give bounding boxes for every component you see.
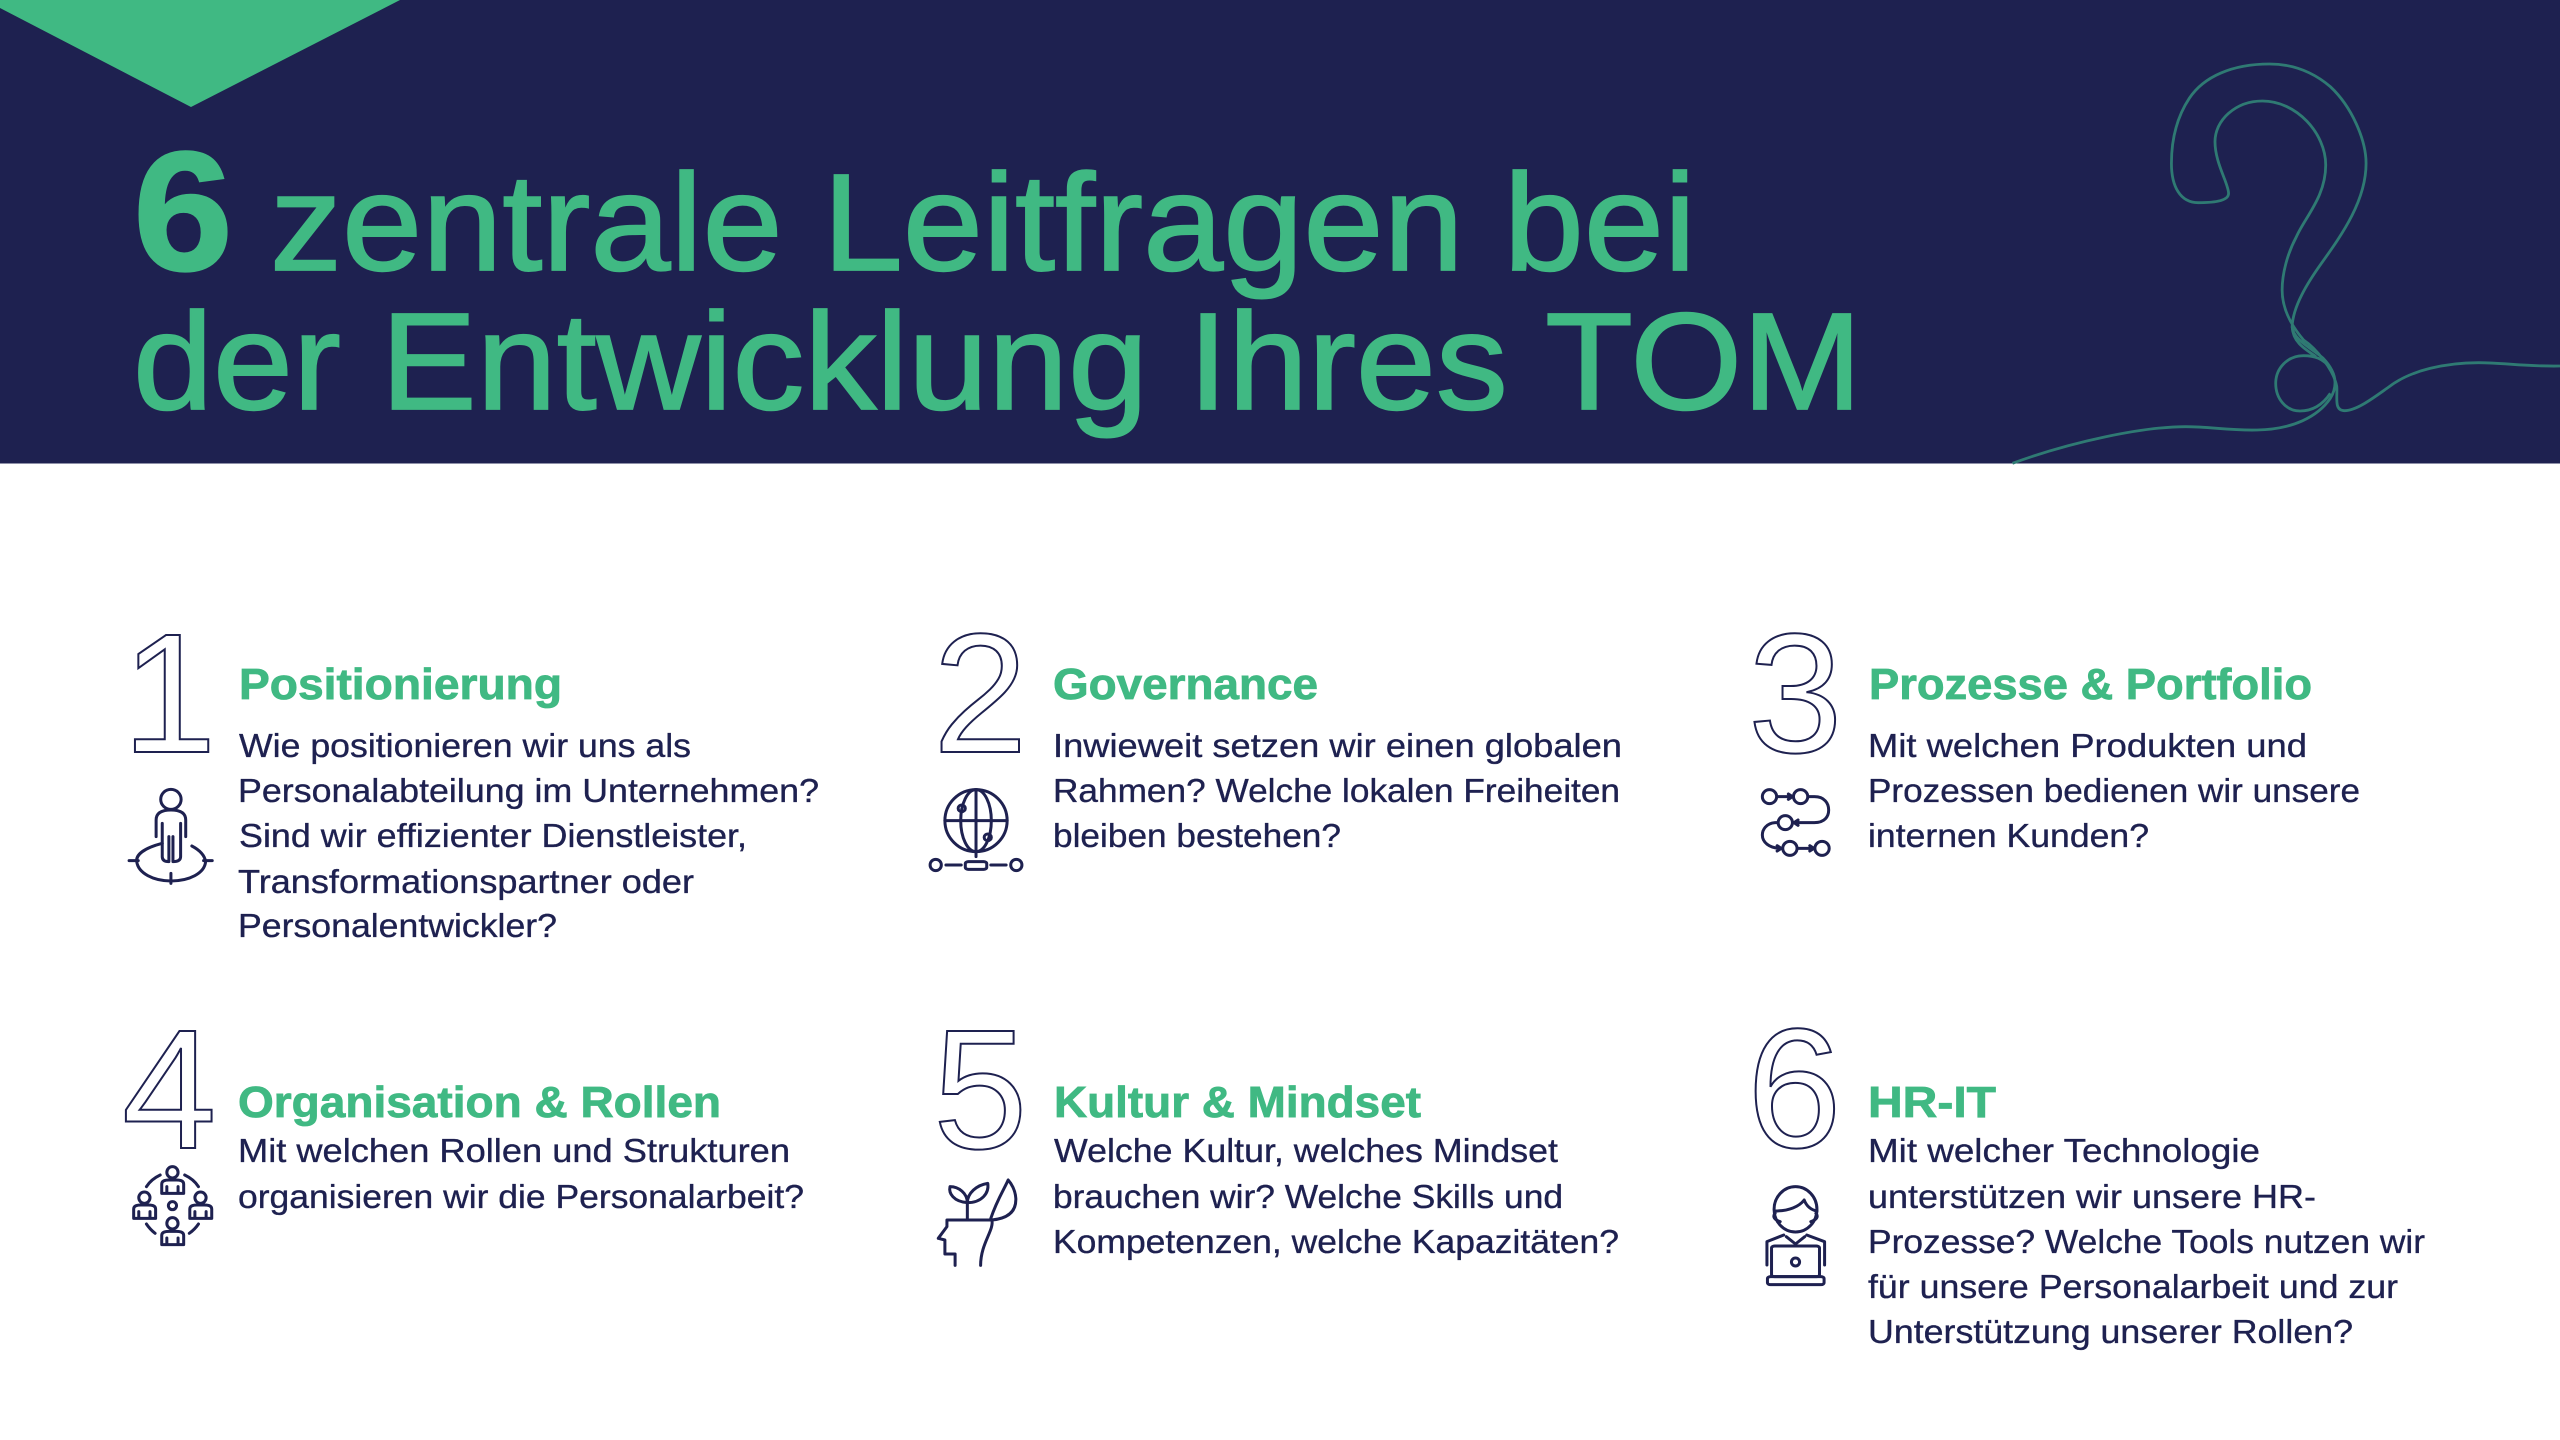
heading: Organisation & Rollen	[238, 1078, 721, 1127]
body text: Personalabteilung im Unternehmen?	[238, 773, 819, 810]
body text: Prozessen bedienen wir unsere	[1868, 773, 2360, 810]
icon: person on target	[129, 789, 212, 883]
body text: für unsere Personalarbeit und zur	[1868, 1269, 2398, 1306]
body text	[1868, 1133, 2425, 1351]
body text: Personalentwickler?	[238, 908, 557, 945]
body text: brauchen wir? Welche Skills und	[1053, 1179, 1563, 1216]
decorative green triangle	[0, 0, 400, 107]
heading: Governance	[1053, 660, 1318, 709]
number 3: 3	[1748, 599, 1843, 789]
header banner	[0, 0, 2560, 464]
body text: Transformationspartner oder	[238, 864, 694, 901]
panel: 2 Governance	[930, 599, 1622, 871]
panel: 3 Prozesse & Portfolio	[1748, 599, 2360, 855]
number 1: 1	[122, 599, 217, 789]
heading: Kultur & Mindset	[1054, 1078, 1421, 1127]
icon: process flow	[1762, 790, 1829, 855]
panel: 4 Organisation & Rollen	[122, 995, 804, 1245]
body text	[238, 728, 819, 945]
body text: Mit welchen Rollen und Strukturen	[238, 1133, 790, 1170]
title: 6	[133, 117, 233, 307]
body text	[238, 1133, 804, 1216]
body text: Unterstützung unserer Rollen?	[1868, 1314, 2353, 1351]
heading: HR-IT	[1868, 1078, 1996, 1127]
body text: Prozesse? Welche Tools nutzen wir	[1868, 1224, 2425, 1261]
number 6: 6	[1747, 994, 1842, 1184]
panel: 6 HR-IT	[1747, 994, 2425, 1351]
body text: internen Kunden?	[1868, 818, 2149, 855]
body text: Inwieweit setzen wir einen globalen	[1053, 728, 1622, 765]
number 5: 5	[933, 995, 1028, 1185]
title: der Entwicklung Ihres TOM	[133, 285, 1862, 439]
panel: 1 Positionierung	[122, 599, 819, 945]
body text: Welche Kultur, welches Mindset	[1054, 1133, 1559, 1170]
heading: Positionierung	[239, 660, 562, 709]
title: zentrale Leitfragen bei	[270, 146, 1696, 300]
body text	[1053, 728, 1622, 855]
body text: Mit welcher Technologie	[1868, 1133, 2260, 1170]
body text: Sind wir effizienter Dienstleister,	[239, 818, 747, 855]
icon: head with plant	[938, 1180, 1016, 1265]
body text: unterstützen wir unsere HR-	[1868, 1179, 2316, 1216]
body text: organisieren wir die Personalarbeit?	[238, 1179, 804, 1216]
body text: Rahmen? Welche lokalen Freiheiten	[1053, 773, 1620, 810]
icon: team circle	[134, 1167, 212, 1245]
question mark line drawing	[2012, 64, 2560, 463]
body text: bleiben bestehen?	[1053, 818, 1341, 855]
panel: 5 Kultur & Mindset	[933, 995, 1619, 1265]
body text: Wie positionieren wir uns als	[239, 728, 691, 765]
title	[133, 117, 1862, 439]
number 4: 4	[122, 995, 217, 1185]
body text: Mit welchen Produkten und	[1868, 728, 2307, 765]
icon: globe network	[930, 790, 1022, 871]
heading: Prozesse & Portfolio	[1869, 660, 2312, 709]
body text	[1053, 1133, 1619, 1261]
body text	[1868, 728, 2360, 855]
body text: Kompetenzen, welche Kapazitäten?	[1053, 1224, 1619, 1261]
icon: person with laptop	[1767, 1187, 1825, 1285]
number 2: 2	[933, 599, 1028, 789]
